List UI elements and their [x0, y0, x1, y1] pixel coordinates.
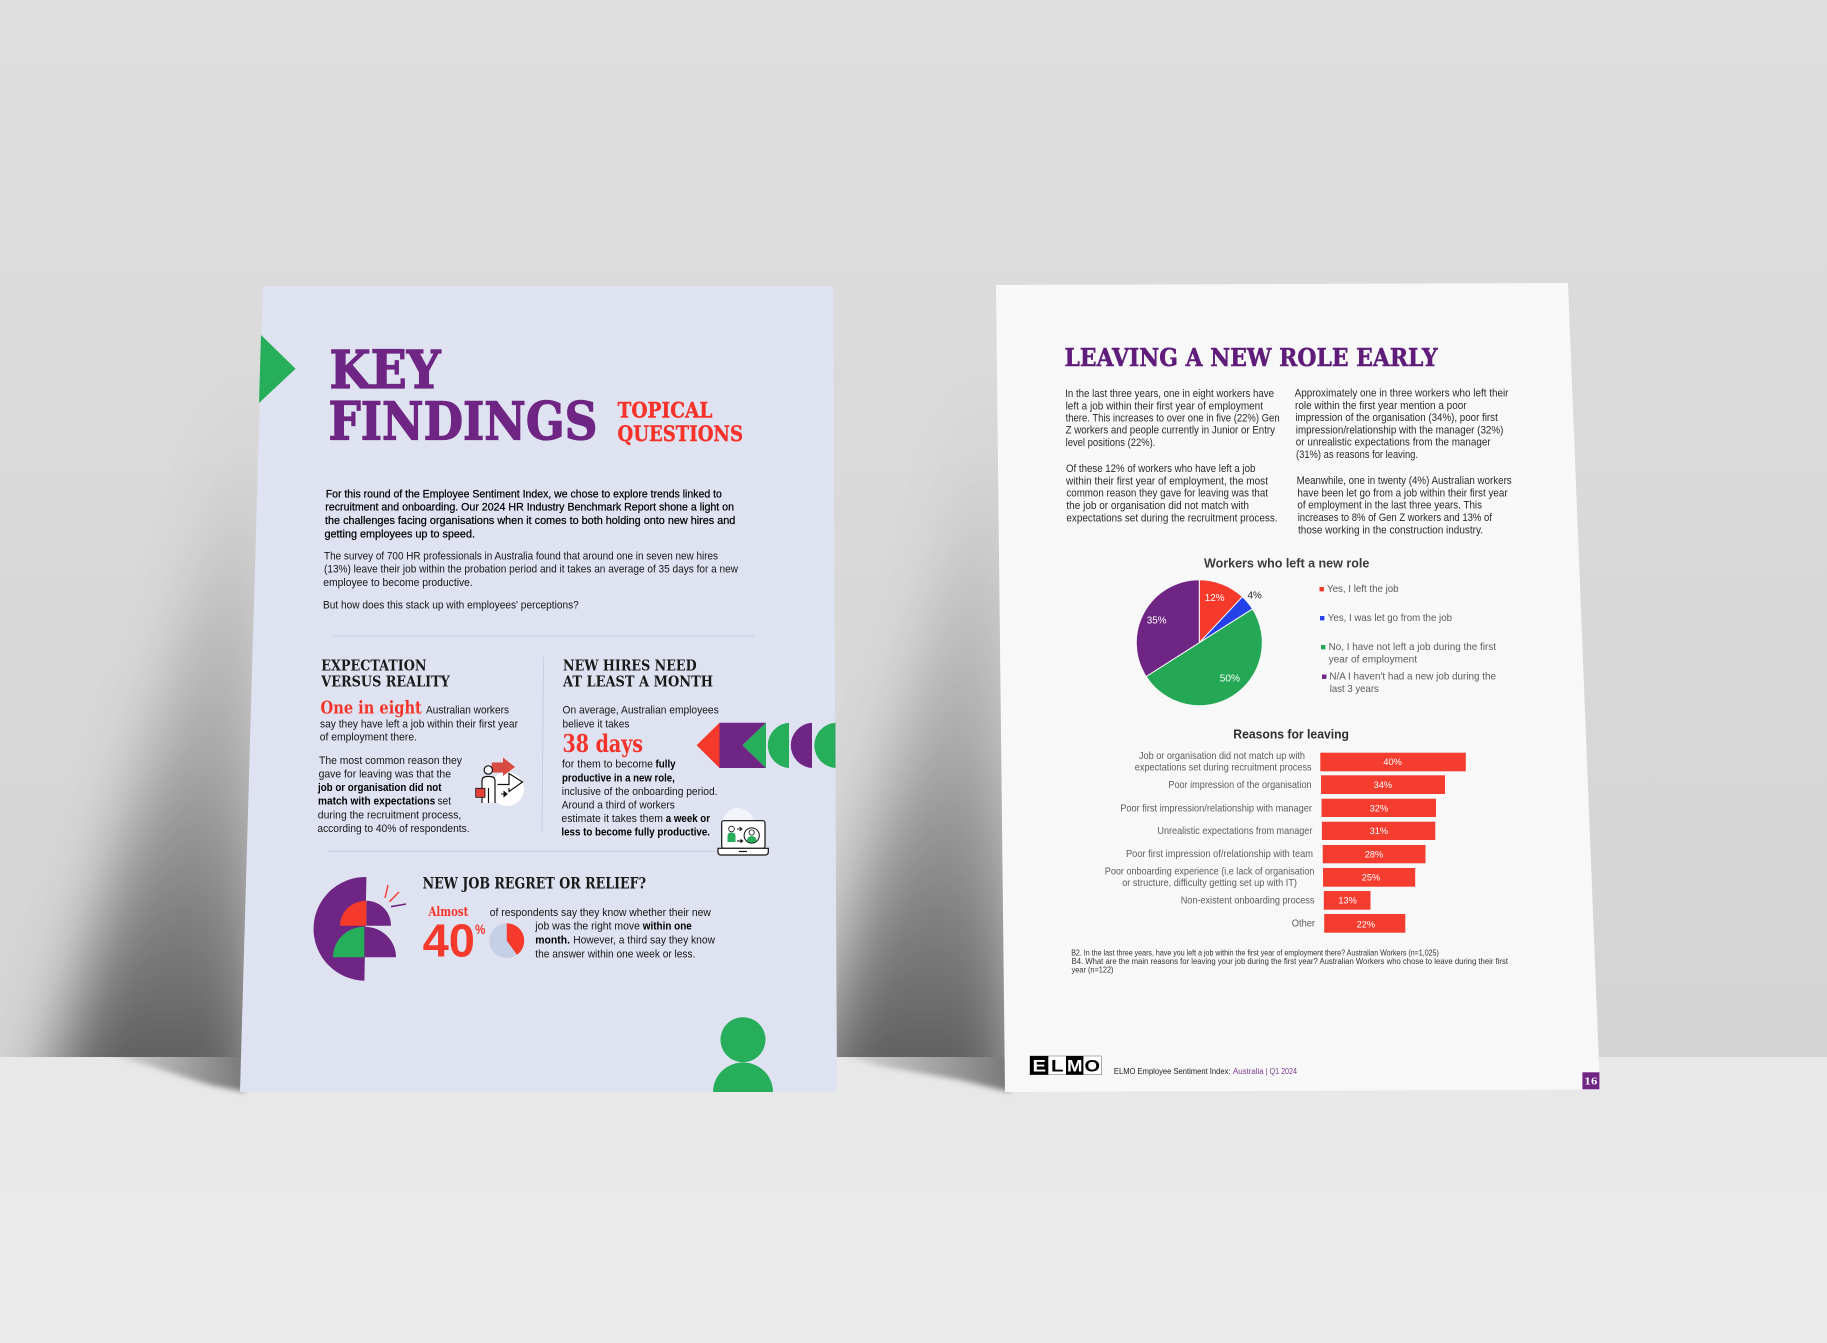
bar chart category labels: Other [1292, 919, 1316, 930]
icon: person with arrows [476, 758, 524, 806]
right column text: or unrealistic expectations from the manager [1296, 437, 1491, 449]
bar chart category labels: Poor first impression of/relationship with team [1126, 849, 1313, 860]
body text: set [438, 796, 451, 808]
bar chart: reasons for leaving: 25% [1362, 872, 1380, 882]
body text: inclusive of the onboarding period. [562, 786, 718, 798]
section: new job regret or relief [314, 873, 715, 981]
bar chart heading: Reasons for leaving [1233, 728, 1349, 742]
pie: 40 percent [489, 923, 524, 958]
body text: month. [535, 935, 570, 947]
bar chart: reasons for leaving: 31% [1370, 826, 1388, 836]
page sheet [240, 286, 837, 1092]
bar chart category labels: Job or organisation did not match up with [1139, 751, 1305, 762]
panel: leaving a new role early page [996, 283, 1600, 1092]
stat: 38 days: 38 days [562, 729, 643, 758]
right column text: have been let go from a job within their first year [1297, 487, 1508, 499]
green triangle marker [259, 335, 296, 403]
right column text: those working in the construction industry. [1298, 524, 1483, 536]
pie chart heading: Workers who left a new role [1204, 557, 1369, 571]
pie value labels: 35% [1147, 615, 1166, 626]
bar chart: reasons for leaving: 32% [1370, 803, 1388, 813]
left column text: In the last three years, one in eight workers have [1065, 388, 1274, 400]
footnotes: B4. What are the main reasons for leaving your job during the first year? Australian Workers who chose to leave during their first [1072, 957, 1509, 966]
bar chart category labels: Poor onboarding experience (i.e lack of organisation [1105, 867, 1314, 878]
body text: match with expectations [318, 796, 435, 808]
heading: AT LEAST A MONTH [562, 673, 713, 691]
body text: fully [656, 759, 676, 771]
subtitle: TOPICAL [618, 397, 713, 422]
bar chart category labels: Unrealistic expectations from manager [1157, 826, 1313, 837]
logo: ELMO: E [1032, 1056, 1046, 1076]
body text: Australian workers [426, 705, 509, 717]
body text: gave for leaving was that the [319, 768, 451, 780]
body text [561, 705, 719, 839]
page number: 16 [1584, 1076, 1598, 1088]
wall shadows behind the pages [40, 360, 1020, 1130]
body text: estimate it takes them [561, 813, 663, 825]
title: KEY [330, 340, 441, 401]
bar chart: reasons for leaving: 40% [1383, 757, 1402, 767]
icon: laptop with people [718, 808, 768, 855]
left column text: Z workers and people currently in Junior or Entry [1066, 425, 1276, 437]
body text: believe it takes [562, 718, 629, 730]
bar chart: reasons for leaving: 34% [1374, 780, 1392, 790]
right column text: role within the first year mention a poor [1295, 400, 1467, 412]
intro text: (13%) leave their job within the probation period and it takes an average of 35 days for a new [324, 564, 738, 576]
left column text: within their first year of employment, the most [1065, 476, 1268, 488]
body text: say they have left a job within their first year [320, 718, 518, 730]
body text: The most common reason they [319, 755, 463, 767]
heading: NEW HIRES NEED [563, 656, 697, 674]
decorative shape row [697, 723, 836, 768]
right column text: impression of the organisation (34%), poor first [1295, 412, 1498, 424]
body text: Around a third of workers [562, 799, 675, 811]
right column text: of employment in the last three years. This [1297, 500, 1482, 512]
body text: during the recruitment process, [318, 809, 461, 821]
bar chart: reasons for leaving: 28% [1365, 850, 1383, 860]
floor shadows beside the pages [117, 1057, 1012, 1095]
bar chart category labels: Poor first impression/relationship with manager [1120, 803, 1313, 814]
footer text: ELMO Employee Sentiment Index: [1114, 1066, 1230, 1076]
title: FINDINGS [328, 392, 598, 453]
bar chart: reasons for leaving [1320, 753, 1466, 933]
body text: job was the right move [534, 921, 640, 933]
body text: a week or [666, 813, 710, 825]
logo: ELMO: O [1084, 1056, 1100, 1076]
title: LEAVING A NEW ROLE EARLY [1064, 343, 1438, 372]
panel: key findings page [240, 286, 837, 1092]
pie value labels: 4% [1248, 590, 1262, 601]
stat: almost 40 percent: 40 [423, 915, 475, 967]
bar chart category labels: Non-existent onboarding process [1181, 895, 1314, 906]
bar chart category labels [1105, 751, 1316, 930]
footnotes: B2. In the last three years, have you left a job within the first year of employment there? Australian Workers (n=1,025) [1071, 949, 1439, 958]
pie legend: N/A I haven't had a new job during the [1329, 671, 1496, 682]
stat: almost 40 percent: % [475, 921, 486, 937]
pie value labels: 12% [1205, 593, 1225, 604]
stat: one in eight: One in eight [320, 697, 422, 718]
pie legend: No, I have not left a job during the first [1329, 642, 1496, 653]
pie legend: Yes, I left the job [1327, 584, 1399, 595]
logo: ELMO [1030, 1056, 1101, 1076]
body text: However, a third say they know [573, 935, 715, 947]
section: new hires need at least a month [561, 656, 836, 855]
pie legend [1320, 584, 1496, 695]
intro text: employee to become productive. [323, 577, 473, 589]
bar chart category labels: or structure, difficulty getting set up with IT) [1122, 878, 1297, 889]
heading: EXPECTATION [321, 656, 427, 674]
left column text [1065, 388, 1280, 524]
body text: the answer within one week or less. [535, 948, 695, 960]
page sheet [996, 283, 1600, 1092]
body text: according to 40% of respondents. [317, 823, 470, 835]
intro text: For this round of the Employee Sentiment Index, we chose to explore trends linked to [326, 489, 722, 501]
left column text: left a job within their first year of employment [1066, 400, 1263, 412]
bar chart category labels: Poor impression of the organisation [1168, 780, 1312, 791]
bar chart category labels: expectations set during recruitment process [1135, 763, 1312, 774]
intro text: The survey of 700 HR professionals in Australia found that around one in seven new hires [324, 551, 718, 563]
body text: job or organisation did not [317, 782, 442, 794]
heading [562, 656, 713, 691]
left column text: expectations set during the recruitment process. [1066, 512, 1278, 524]
right column text: (31%) as reasons for leaving. [1296, 449, 1418, 461]
footer text: Australia [1233, 1066, 1264, 1076]
body text: of employment there. [320, 732, 417, 744]
body text [490, 907, 715, 960]
logo: ELMO: M [1067, 1056, 1082, 1076]
intro text [323, 489, 738, 612]
right column text [1295, 388, 1512, 536]
stat: almost 40 percent: Almost [428, 905, 468, 920]
pie legend: last 3 years [1330, 684, 1379, 695]
logo: ELMO: L [1051, 1056, 1064, 1076]
title [328, 340, 598, 453]
footer text: | Q1 2024 [1266, 1066, 1297, 1076]
bar chart: reasons for leaving: 13% [1338, 896, 1357, 906]
left column text: Of these 12% of workers who have left a job [1066, 463, 1255, 475]
icon: green person [713, 1017, 773, 1092]
left column text: common reason they gave for leaving was that [1066, 488, 1268, 500]
footnotes: year (n=122) [1072, 966, 1114, 975]
pie legend: Yes, I was let go from the job [1328, 613, 1452, 624]
intro text: getting employees up to speed. [324, 528, 475, 540]
bar chart: reasons for leaving: 22% [1357, 920, 1375, 930]
body text: productive in a new role, [562, 772, 675, 784]
left column text: there. This increases to over one in five (22%) Gen [1066, 413, 1280, 425]
body text [317, 705, 518, 835]
pie legend: year of employment [1329, 655, 1417, 666]
heading: VERSUS REALITY [320, 673, 450, 691]
stat: almost 40 percent [423, 905, 486, 967]
subtitle: QUESTIONS [618, 421, 743, 446]
page number [1582, 1072, 1599, 1089]
pie value labels [1147, 590, 1262, 685]
left column text: the job or organisation did not match with [1066, 500, 1249, 512]
emblem: abstract head shapes [314, 877, 406, 981]
intro text: the challenges facing organisations when it comes to both holding onto new hires and [325, 515, 735, 527]
subtitle [618, 397, 743, 446]
right column text: Meanwhile, one in twenty (4%) Australian workers [1297, 475, 1512, 487]
body text: less to become fully productive. [561, 827, 710, 839]
heading [320, 656, 450, 691]
footnotes [1071, 949, 1509, 975]
wall background [0, 0, 1827, 1058]
floor background [0, 1057, 1827, 1343]
body text: On average, Australian employees [562, 705, 719, 717]
right column text: increases to 8% of Gen Z workers and 13% of [1298, 512, 1492, 524]
left column text: level positions (22%). [1066, 437, 1155, 449]
pie value labels: 50% [1220, 674, 1240, 685]
body text: within one [642, 921, 692, 933]
right column text: Approximately one in three workers who left their [1295, 388, 1509, 400]
pie chart: workers who left a new role [1136, 580, 1262, 706]
heading: NEW JOB REGRET OR RELIEF? [423, 873, 646, 892]
intro text: But how does this stack up with employees' perceptions? [323, 600, 579, 612]
body text: of respondents say they know whether their new [490, 907, 711, 919]
right column text: impression/relationship with the manager (32%) [1296, 424, 1503, 436]
intro text: recruitment and onboarding. Our 2024 HR Industry Benchmark Report shone a light on [325, 502, 734, 514]
section: expectation versus reality [317, 656, 524, 835]
body text: for them to become [562, 759, 653, 771]
